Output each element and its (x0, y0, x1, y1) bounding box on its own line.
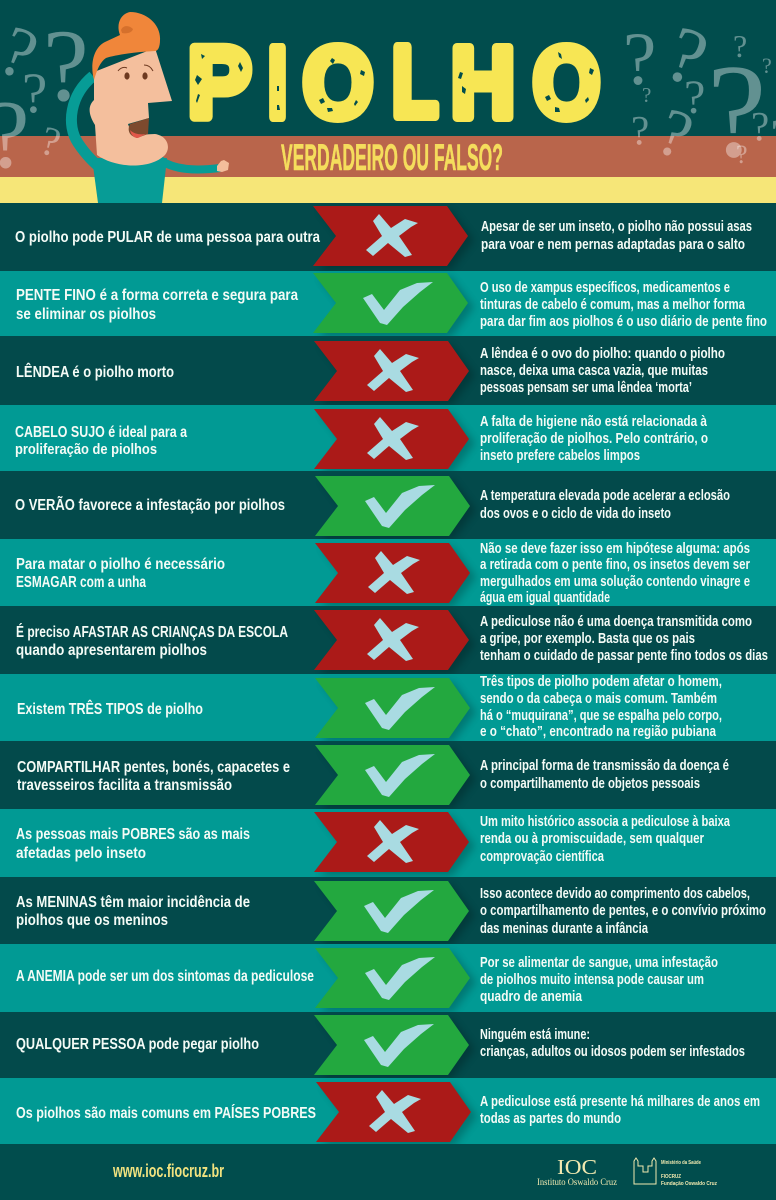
row 6 false: Para matar o piolho é necessário (16, 556, 225, 573)
row 7 false: É preciso AFASTAR AS CRIANÇAS DA ESCOLA (16, 624, 288, 641)
title PIOLHO: O (303, 27, 373, 139)
eyes (124, 72, 130, 80)
row 5 true (0, 471, 776, 540)
row 6 false (0, 539, 776, 607)
row 1 false (0, 203, 776, 271)
question marks left: ? (43, 9, 89, 123)
row 2 true (0, 271, 776, 337)
row 4 false: proliferação de piolhos (15, 442, 157, 458)
title PIOLHO: H (451, 27, 515, 139)
question marks right: ? (733, 28, 747, 64)
row 10 false: As pessoas mais POBRES são as mais (16, 826, 250, 843)
character: surprised man scratching head (71, 12, 229, 203)
row 13 true (0, 1012, 776, 1079)
row 10 false: renda ou à promiscuidade, sem qualquer (480, 831, 704, 847)
mouth (129, 118, 149, 138)
question marks right: ? (762, 53, 772, 78)
question marks right: ? (736, 140, 748, 169)
brown subtitle band (0, 136, 776, 177)
title PIOLHO: O (533, 27, 600, 139)
row 11 true: As MENINAS têm maior incidência de (16, 894, 250, 911)
torso (92, 158, 167, 203)
row 6 false: água em igual quantidade (480, 590, 610, 606)
question marks right: ? (707, 37, 766, 185)
row 4 false: CABELO SUJO é ideal para a (15, 424, 187, 441)
row 14 false: todas as partes do mundo (480, 1111, 621, 1127)
row 9 true (0, 741, 776, 809)
row 9 true: o compartilhamento de objetos pessoais (480, 776, 700, 792)
row 12 true: A ANEMIA pode ser um dos sintomas da pediculose (16, 968, 314, 985)
row 1 false: O piolho pode PULAR de uma pessoa para outra (15, 229, 320, 246)
row 12 true (0, 944, 776, 1012)
row 3 false: nasce, deixa uma casca vazia, que muitas (480, 363, 708, 379)
row 7 false: a gripe, por exemplo. Basta que os pais (480, 631, 695, 647)
row 9 true: COMPARTILHAR pentes, bonés, capacetes e (17, 759, 290, 776)
row 11 true: piolhos que os meninos (16, 912, 168, 929)
row 14 false (0, 1078, 776, 1146)
title PIOLHO: P (188, 27, 251, 139)
row 6 false: ESMAGAR com a unha (16, 574, 146, 591)
raised arm (71, 76, 105, 172)
hand (217, 160, 229, 172)
row 2 true: PENTE FINO é a forma correta e segura para (16, 287, 298, 304)
row 11 true: das meninas durante a infância (480, 921, 649, 937)
row 10 false (0, 809, 776, 877)
title PIOLHO (188, 26, 600, 139)
title PIOLHO: I (268, 27, 287, 139)
question marks right: ? (655, 9, 718, 104)
header background (0, 0, 776, 136)
question marks right: ? (648, 92, 703, 174)
row 5 true: O VERÃO favorece a infestação por piolhos (15, 496, 285, 514)
question marks right: ? (631, 107, 649, 153)
row 12 true: quadro de anemia (480, 989, 583, 1005)
IOC logo (537, 1155, 617, 1187)
row 5 true: dos ovos e o ciclo de vida do inseto (480, 506, 671, 522)
text: VERDADEIRO OU FALSO? (281, 137, 503, 178)
question marks left (0, 9, 89, 189)
row 8 true: Existem TRÊS TIPOS de piolho (17, 700, 203, 718)
row 8 true: e o “chato”, encontrado na região pubiana (480, 724, 717, 740)
question marks right: ? (642, 83, 651, 107)
head (90, 48, 172, 166)
row 4 false: A falta de higiene não está relacionada à (480, 414, 708, 430)
question marks right: ? (751, 103, 769, 149)
row 8 true: Três tipos de piolho podem afetar o homem, (480, 674, 722, 690)
hair (92, 12, 160, 80)
yellow band (0, 177, 776, 203)
row 13 true: QUALQUER PESSOA pode pegar piolho (16, 1036, 259, 1053)
website: www.ioc.fiocruz.br (112, 1161, 224, 1181)
Fiocruz text: Ministério da Saúde (661, 1160, 701, 1166)
row 4 false (0, 405, 776, 473)
outstretched arm (160, 160, 220, 169)
question marks left: ? (22, 62, 47, 125)
row 12 true: de piolhos muito intensa pode causar um (480, 972, 704, 988)
row 7 false (0, 606, 776, 674)
row 3 false: pessoas pensam ser uma lêndea ‘morta’ (480, 380, 692, 396)
row 10 false: comprovação científica (480, 849, 605, 865)
row 2 true: se eliminar os piolhos (16, 306, 156, 323)
row 11 true (0, 877, 776, 945)
question marks left: ? (36, 117, 66, 166)
row 10 false: afetadas pelo inseto (16, 845, 146, 862)
row 7 false: quando apresentarem piolhos (16, 642, 207, 659)
footer (0, 1144, 776, 1200)
eyebrows (118, 65, 153, 71)
row 4 false: proliferação de piolhos. Pelo contrário, o (480, 431, 708, 447)
question marks right: ? (623, 18, 656, 101)
Fiocruz text: Fundação Oswaldo Cruz (661, 1181, 717, 1187)
row 8 true (0, 674, 776, 742)
row 13 true: Ninguém está imune: (480, 1027, 590, 1043)
IOC logo: IOC (557, 1155, 597, 1179)
row 8 true: sendo o da cabeça o mais comum. Também (480, 691, 717, 707)
title texture specks (195, 52, 594, 112)
row 9 true: travesseiros facilita a transmissão (17, 777, 232, 794)
row 3 false (0, 336, 776, 405)
row 14 false: Os piolhos são mais comuns em PAÍSES POBRES (16, 1105, 316, 1122)
row 3 false: LÊNDEA é o piolho morto (16, 363, 174, 381)
question marks right: ? (684, 71, 705, 124)
question marks right (623, 9, 776, 185)
Fiocruz text: FIOCRUZ (661, 1174, 681, 1180)
row 12 true: Por se alimentar de sangue, uma infestação (480, 955, 718, 971)
row 4 false: inseto prefere cabelos limpos (480, 448, 640, 464)
Fiocruz text (661, 1160, 717, 1187)
Fiocruz castle icon (634, 1158, 656, 1184)
IOC logo: Instituto Oswaldo Cruz (537, 1177, 617, 1187)
title PIOLHO: L (392, 26, 438, 138)
